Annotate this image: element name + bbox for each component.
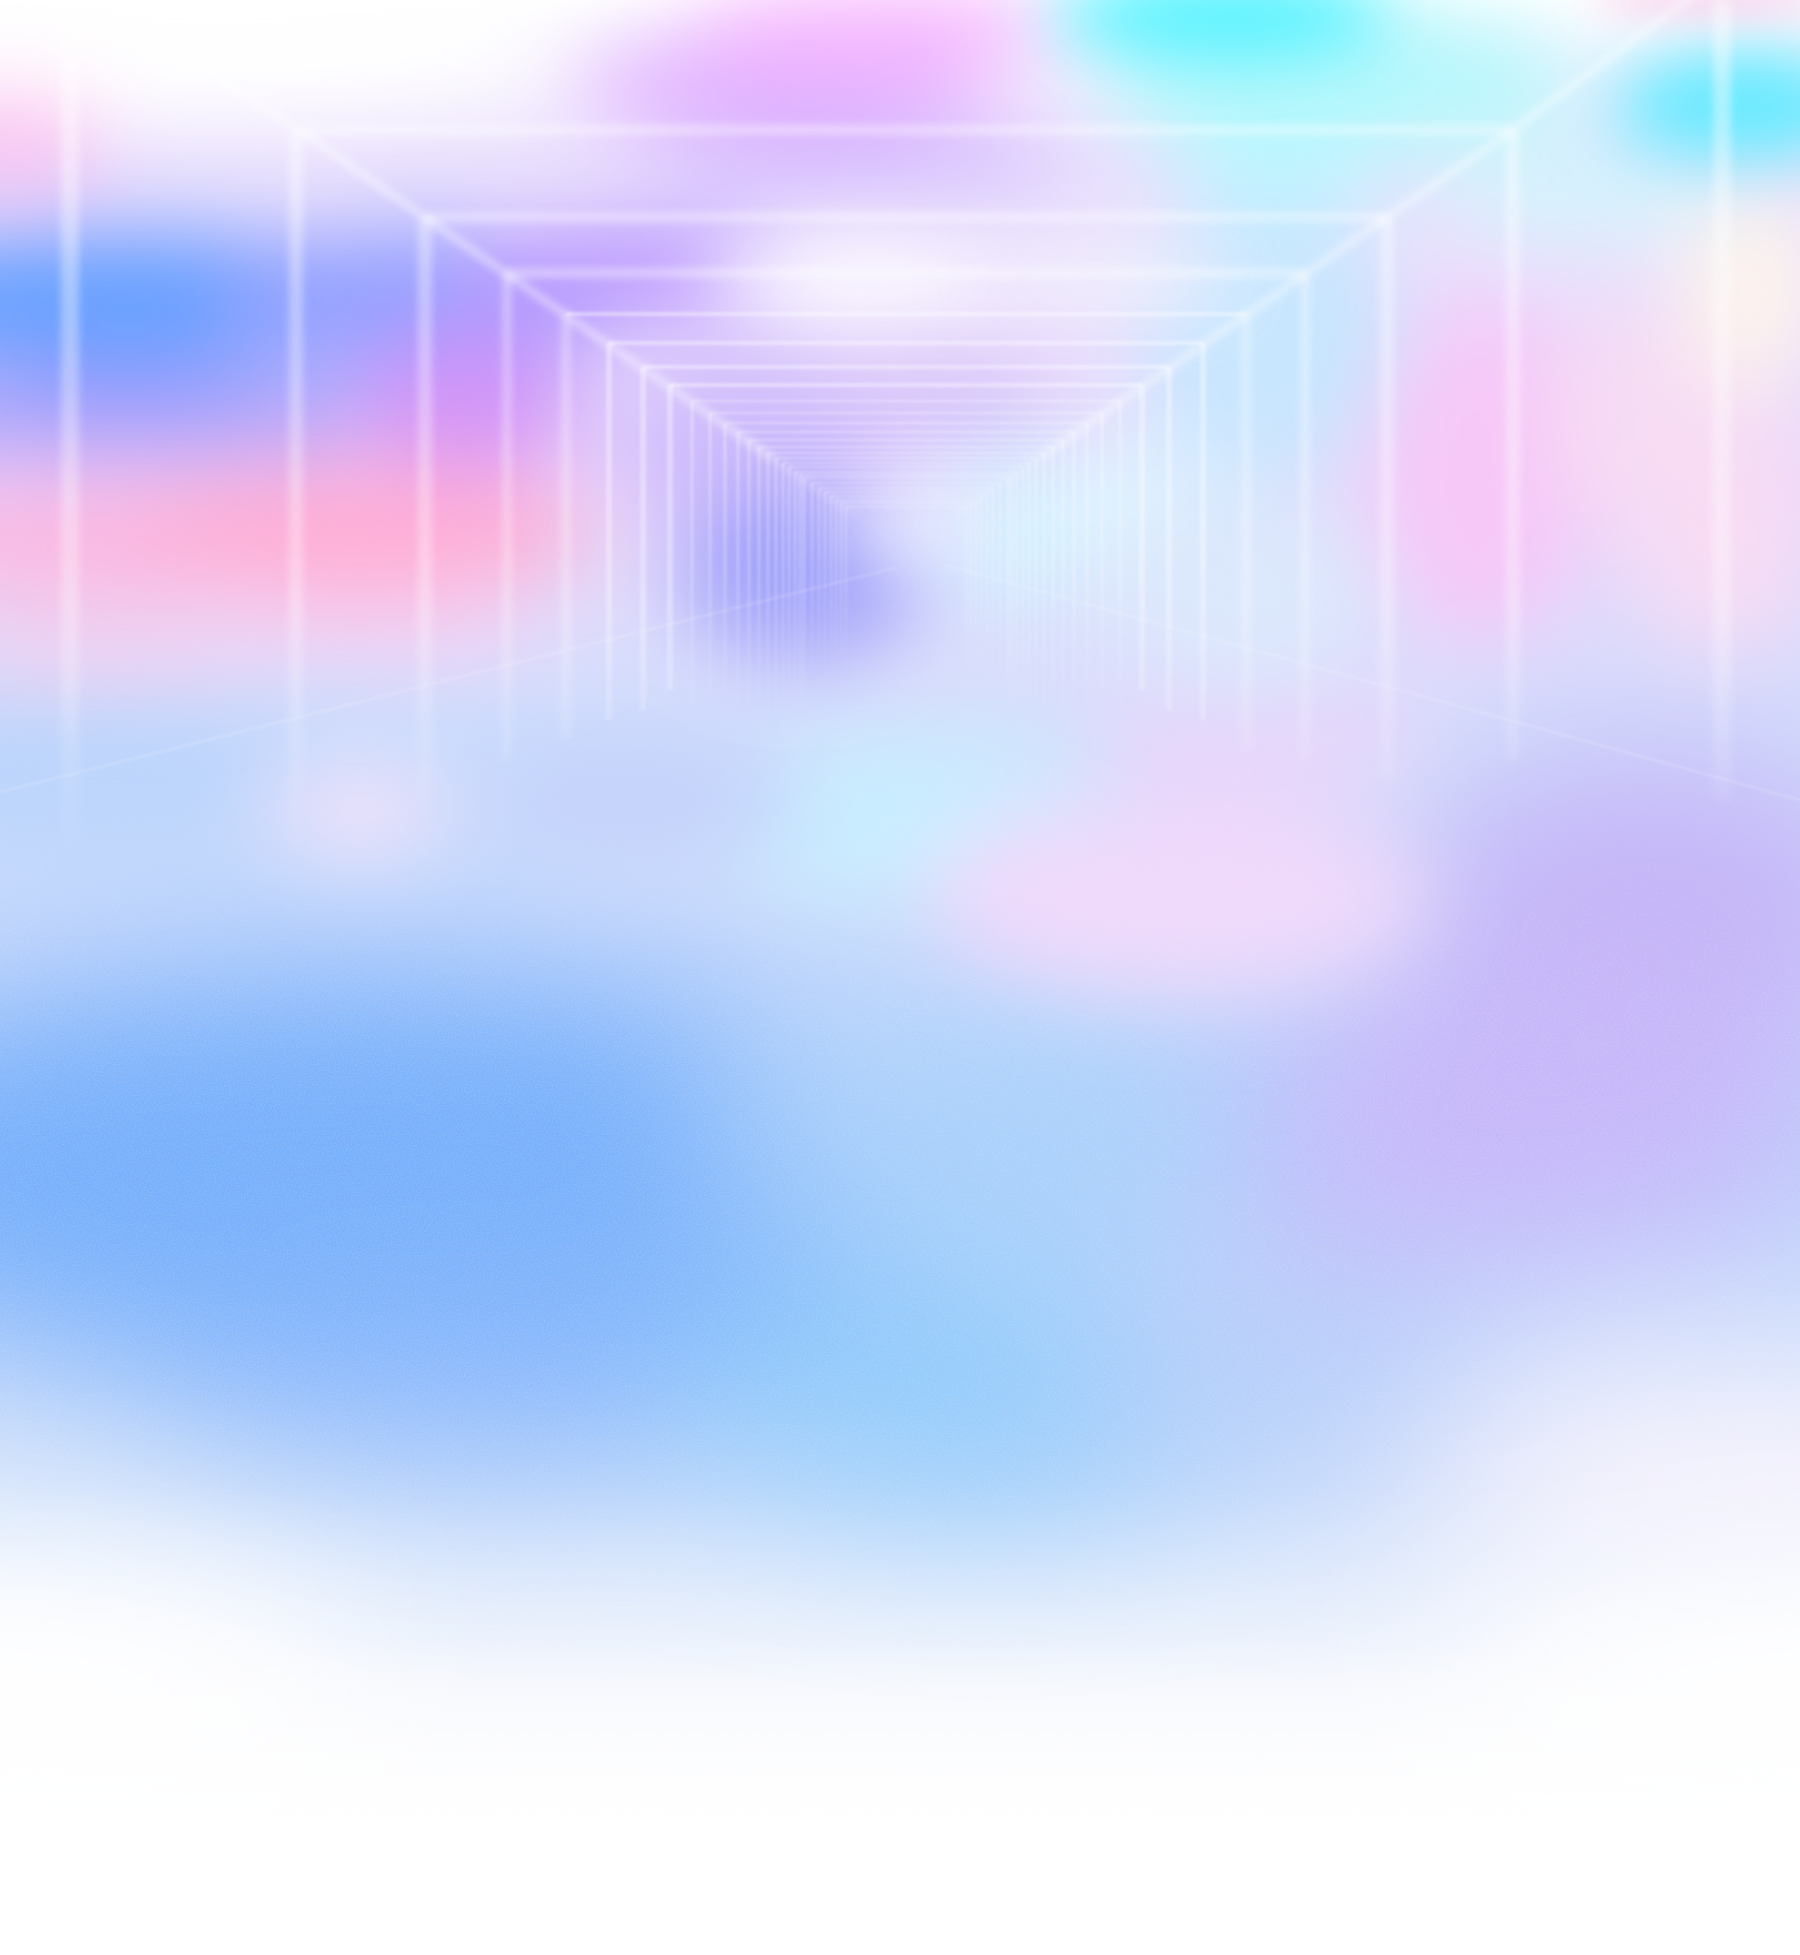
tunnel floor lines: [0, 565, 1800, 800]
mid gradient cloud: [0, 660, 1430, 995]
film grain overlay: [0, 870, 1800, 1590]
bottom white fade: [0, 1640, 1800, 1860]
pale band right of centre glow: [980, 248, 1240, 312]
glow at vanishing point: [845, 483, 1005, 567]
tunnel: perspective frames: [0, 0, 1800, 860]
bright glow above tunnel centre: [700, 250, 1000, 310]
lower gradient cloud: [0, 710, 1800, 1590]
tunnel inner frames: [566, 314, 1246, 720]
bottom corner fades: [0, 1550, 1800, 1810]
upper gradient cloud: [0, 0, 1800, 690]
tunnel outer frames: [70, 0, 1722, 860]
pink top-right corner: [1590, 0, 1800, 12]
cyan highlights: [1050, 0, 1800, 160]
